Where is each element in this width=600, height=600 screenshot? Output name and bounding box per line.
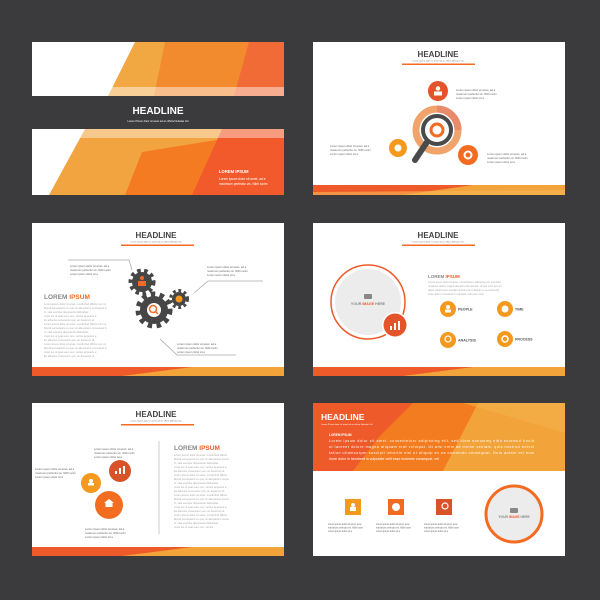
text blocks: Lorem ipsum dolor sit a <box>487 160 515 164</box>
icon list: PEOPLE <box>458 308 473 312</box>
icon list: PROCESS <box>515 338 533 342</box>
text blocks: maximum perfectio vis. Nibh iucim <box>487 156 529 160</box>
lorem ipsum text block: LOREM IPSUM <box>44 294 90 301</box>
lorem ipsum text block: Mundi persequeris ex quo vix alia partem conse <box>174 477 229 481</box>
body text: LOREM IPSUM <box>329 433 352 437</box>
lorem ipsum text block: Lorem ipsum dolor sit amet, mundi illud officiis <box>174 473 228 477</box>
lorem ipsum text block: Lorem ipsum dolor sit amet, mundi illud officiis <box>174 493 228 497</box>
icon: pie circle <box>389 139 407 157</box>
lorem ipsum text: iriure dolor in hendrerit in vulputate velit esse mole <box>428 293 484 296</box>
slide 4: image + icons <box>313 223 565 376</box>
lorem ipsum text block: Mundi persequeris ex quo vix alia partem conse <box>174 457 229 461</box>
text blocks: Lorem ipsum dolor sit amet, ad a <box>487 152 527 156</box>
bottom band <box>313 367 565 376</box>
text blocks: Lorem ipsum dolor sit amet, ad a <box>456 88 496 92</box>
body text: ut laoreet dolore magna aliquam erat volutpat. Ut wisi enim ad minim veniam, quis nostrud exerci <box>329 445 534 449</box>
text blocks: Lorem ipsum dolor sit amet, ad a <box>207 265 247 269</box>
bottom orange shapes <box>49 129 284 195</box>
headline band <box>32 96 284 129</box>
body text: iriure dolor in hendrerit in vulputate velit esse molestie consequat, vel <box>329 457 439 461</box>
text blocks: Lorem ipsum dolor sit a <box>85 535 113 539</box>
gears <box>130 270 188 326</box>
text blocks: maximum perfectio vis. Nibh iucim <box>330 148 372 152</box>
icon list <box>440 301 533 348</box>
image circle: YOUR IMAGE HERE <box>498 515 530 519</box>
image circle <box>331 265 408 339</box>
lorem ipsum text block: Justo ius ut quas eam nec, veritus appetere a <box>174 465 227 469</box>
lorem ipsum text block: Justo ius ut quas eam nec, veritus appetere a <box>174 505 227 509</box>
lorem ipsum text block: Justo ius ut quas eam nec, veritus <box>174 525 214 529</box>
slide 2: magnifier <box>313 42 565 195</box>
lorem ipsum text block: Lorem ipsum dolor sit amet, mundi illud officiis <box>174 453 228 457</box>
lorem ipsum text: tation ullamcorper suscipit lobortis nisl ut aliquip ex ea commodo <box>428 289 500 292</box>
slide 5: circles <box>32 403 284 556</box>
headline: HEADLINE <box>418 50 459 59</box>
lorem ipsum text block: Mundi persequeris ex quo vix alia partem conse <box>174 497 229 501</box>
headline <box>121 410 194 426</box>
slide 3: gears <box>32 223 284 376</box>
lorem ipsum text block: In. Has evertitur disputando definiebas <box>174 521 219 525</box>
text blocks: Lorem ipsum dolor sit a <box>177 350 205 354</box>
text blocks: maximum perfectio vis. Nibh iucim <box>70 268 112 272</box>
text blocks: Lorem ipsum dolor sit amet, ad a <box>85 527 125 531</box>
bottom band <box>32 367 284 376</box>
slide 6: header banner + squares <box>313 403 565 556</box>
body text: Lorem ipsum dolor sit amet, consectetuer adipiscing elit, sed diam nonummy nibh euismod tincid <box>329 439 534 443</box>
icon captions: maximum perfectio vis. Nibh iucim <box>424 526 459 530</box>
lorem ipsum text block: Justo ius ut quas eam nec, veritus appetere a <box>44 314 97 318</box>
headline: Lorem ipsum dolor sit amet ad an officia Nebulae Vel <box>412 60 464 62</box>
icon captions: maximum perfectio vis. Nibh iucim <box>328 526 363 530</box>
text blocks: Lorem ipsum dolor sit a <box>94 455 122 459</box>
body text <box>329 433 534 461</box>
text blocks: maximum perfectio vis. Nibh iucim <box>207 269 249 273</box>
text blocks <box>330 88 529 164</box>
icon captions: maximum perfectio vis. Nibh iucim <box>376 526 411 530</box>
text block lorem ipsum: maximum perfectio vis. Nibh iucim <box>219 182 268 186</box>
lorem ipsum text block: Mundi persequeris ex quo vix alia partem consequat in <box>44 346 107 350</box>
text blocks: Lorem ipsum dolor sit a <box>456 96 484 100</box>
text blocks: Lorem ipsum dolor sit amet, ad a <box>35 467 75 471</box>
lorem ipsum text block: In. Has evertitur disputando definiebas <box>44 330 89 334</box>
icon captions: Lorem ipsum dolor sit a <box>328 530 353 533</box>
lorem ipsum text block: LOREM IPSUM <box>174 445 220 452</box>
headline band: Lorem IPsum dolor sit amet ad an officia Nebulae Vel <box>127 119 189 123</box>
lorem ipsum text block: Lorem ipsum dolor sit amet, mundi illud officiis cum no <box>44 342 107 346</box>
circles <box>81 460 131 519</box>
text blocks: Lorem ipsum dolor sit a <box>70 272 98 276</box>
image circle: YOUR IMAGE HERE <box>351 302 386 306</box>
headline: Lorem ipsum dolor sit amet ad an officia Nebulae Vel <box>130 420 182 422</box>
text blocks: maximum perfectio vis. Nibh iucim <box>456 92 498 96</box>
text blocks: Lorem ipsum dolor sit amet, ad a <box>177 342 217 346</box>
text blocks: Lorem ipsum dolor sit amet, ad a <box>330 144 370 148</box>
image circle <box>486 486 542 542</box>
icon list: TIME <box>515 308 524 312</box>
text blocks: Lorem ipsum dolor sit amet, ad a <box>70 264 110 268</box>
lorem ipsum text block: Lorem ipsum dolor sit amet, mundi illud officiis <box>174 513 228 517</box>
text blocks: maximum perfectio vis. Nibh iucim <box>35 471 77 475</box>
icon captions: Lorem ipsum dolor sit a <box>424 530 449 533</box>
text block lorem ipsum: LOREM IPSUM <box>219 169 249 174</box>
text blocks: Lorem ipsum dolor sit a <box>330 152 358 156</box>
lorem ipsum text block: Lorem ipsum dolor sit amet, mundi illud officiis cum no <box>44 302 107 306</box>
top orange shapes <box>108 42 284 96</box>
text blocks <box>70 264 249 354</box>
headline <box>402 50 475 65</box>
lorem ipsum text block: Justo ius ut quas eam nec, veritus appetere a <box>44 350 97 354</box>
lorem ipsum text block: Mundi persequeris ex quo vix alia partem consequat in <box>44 306 107 310</box>
icon captions: Lorem ipsum dolor sit amet, ad a <box>376 523 410 526</box>
orange header <box>313 403 565 471</box>
text blocks: maximum perfectio vis. Nibh iucim <box>94 451 136 455</box>
body text: tation ullamcorper suscipit lobortis nisl ut aliquip ex ea commodo consequat. Duis autem vel eum <box>329 451 534 455</box>
lorem ipsum text block: Ex albucius consecetur quo, an deserunt sit <box>174 469 224 473</box>
lorem ipsum text block: Ex albucius consecetur quo, an deserunt sit <box>174 489 224 493</box>
lorem ipsum text block: Justo ius ut quas eam nec, veritus appetere a <box>44 334 97 338</box>
text blocks <box>35 447 136 539</box>
text blocks: maximum perfectio vis. Nibh iucim <box>85 531 127 535</box>
lorem ipsum text block: Mundi persequeris ex quo vix alia partem consequat in <box>44 326 107 330</box>
headline: HEADLINE <box>136 410 177 419</box>
icon: gear circle <box>458 145 478 165</box>
headline: HEADLINE <box>418 231 459 240</box>
headline <box>402 231 475 246</box>
bottom band <box>313 185 565 195</box>
headline: Lorem ipsum dolor sit amet ad an officia Nebulae Vel <box>130 240 182 244</box>
text blocks: Lorem ipsum dolor sit amet, ad a <box>94 447 134 451</box>
lorem ipsum text block: In. Has evertitur disputando definiebas <box>44 310 89 314</box>
lorem ipsum text <box>428 274 502 296</box>
icon captions: Lorem ipsum dolor sit amet, ad a <box>328 523 362 526</box>
lorem ipsum text: Lorem ipsum dolor sit amet, consectetuer adipiscing elit, sed diam <box>428 281 501 284</box>
text blocks: maximum perfectio vis. Nibh iucim <box>177 346 219 350</box>
slide 1: title slide <box>32 42 284 195</box>
text blocks: Lorem ipsum dolor sit a <box>207 273 235 277</box>
lorem ipsum text block <box>174 445 229 529</box>
headline: Lorem ipsum dolor sit amet ad an officia Nebulae Vel <box>412 240 464 244</box>
headline <box>121 231 194 246</box>
icon list: ANALYSIS <box>458 338 476 342</box>
lorem ipsum text block: In. Has evertitur disputando definiebas <box>174 461 219 465</box>
lorem ipsum text block: Ex albucius consecetur quo, an deserunt sit <box>44 354 94 358</box>
lorem ipsum text block: In. Has evertitur disputando definiebas <box>174 501 219 505</box>
headline: Lorem IPsum dolor sit amet ad an officia Nebulae Vel <box>321 423 373 426</box>
headline <box>321 412 373 426</box>
lorem ipsum text block: In. Has evertitur disputando definiebas <box>174 481 219 485</box>
connector lines <box>68 260 263 355</box>
lorem ipsum text: ut laoreet dolore magna aliquam erat volutpat. Ut wisi enim ad min <box>428 285 502 288</box>
headline: HEADLINE <box>321 412 365 422</box>
icon captions <box>328 523 459 533</box>
lorem ipsum text block <box>44 294 107 358</box>
icon captions: Lorem ipsum dolor sit amet, ad a <box>424 523 458 526</box>
lorem ipsum text block: Ex albucius consecetur quo, an deserunt sit <box>174 509 224 513</box>
lorem ipsum text block: Mundi persequeris ex quo vix alia partem conse <box>174 517 229 521</box>
lorem ipsum text block: Justo ius ut quas eam nec, veritus appetere a <box>174 485 227 489</box>
text blocks: Lorem ipsum dolor sit a <box>35 475 63 479</box>
magnifier <box>415 109 458 160</box>
icon: person circle <box>428 81 448 101</box>
icon captions: Lorem ipsum dolor sit a <box>376 530 401 533</box>
lorem ipsum text block: Ex albucius consecetur quo, an deserunt sit <box>44 338 94 342</box>
headline band: HEADLINE <box>132 106 184 117</box>
bottom band <box>32 547 284 556</box>
lorem ipsum text block: Ex albucius consecetur quo, an deserunt sit <box>44 318 94 322</box>
icon squares <box>345 499 452 515</box>
text block lorem ipsum: Lorem ipsum dolor sit amet, ad a <box>219 177 266 181</box>
lorem ipsum text block: Lorem ipsum dolor sit amet, mundi illud officiis cum no <box>44 322 107 326</box>
text block lorem ipsum <box>219 169 268 186</box>
lorem ipsum text: LOREM IPSUM <box>428 274 460 279</box>
headline: HEADLINE <box>136 231 177 240</box>
